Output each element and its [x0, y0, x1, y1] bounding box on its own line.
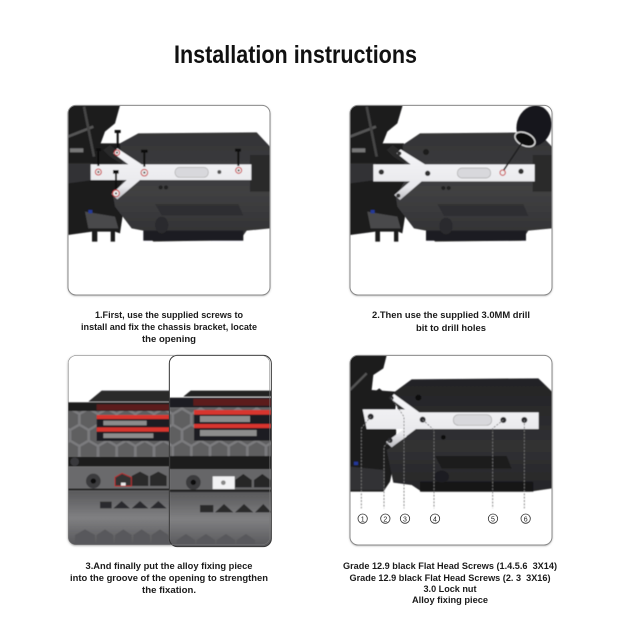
truck suspension and wheel: [350, 355, 397, 492]
caption: parts list: 3.0 Lock nut: [424, 584, 477, 595]
number markers 1 to 6: 4: [433, 516, 437, 523]
caption: step 3: [70, 561, 268, 596]
caption: step 1: 1.First, use the supplied screws to: [95, 310, 243, 321]
title: Installation instructions: [174, 41, 417, 69]
inset photo with alloy piece in place: [169, 355, 271, 547]
number markers 1 to 6: 1: [361, 516, 365, 523]
caption: step 2: 2.Then use the supplied 3.0MM drill: [372, 310, 530, 321]
battery tray close-up: [68, 391, 171, 545]
number markers 1 to 6: [358, 514, 530, 523]
number markers 1 to 6: 5: [491, 516, 495, 523]
caption: parts list: [343, 561, 557, 606]
truck suspension and wheel: [350, 105, 408, 242]
caption: step 2: bit to drill holes: [416, 323, 486, 334]
truck suspension and wheel: [68, 105, 125, 242]
silver chassis bracket: [363, 394, 539, 447]
caption: step 1: the opening: [142, 334, 196, 345]
panel: step 1 photo: [68, 105, 270, 296]
caption: step 2: [372, 310, 530, 334]
panel: step 2 photo: [350, 102, 556, 296]
caption: parts list: Alloy fixing piece: [412, 595, 488, 606]
caption: step 3: the fixation.: [142, 585, 196, 596]
caption: parts list: Grade 12.9 black Flat Head Screws (1.4.5.6 3X14): [343, 561, 557, 572]
caption: step 1: install and fix the chassis bracket, locate: [81, 322, 257, 333]
silver chassis bracket: [91, 148, 251, 199]
chassis body: [103, 132, 270, 242]
chassis body: [387, 132, 552, 242]
number markers 1 to 6: 6: [524, 516, 528, 523]
caption: step 1: [81, 310, 257, 345]
dashed leader lines: [361, 398, 524, 508]
opening outlined in red: [115, 473, 131, 486]
silver chassis bracket: [373, 149, 535, 200]
caption: step 3: into the groove of the opening to strengthen: [70, 573, 268, 584]
panel: parts key photo: [350, 355, 552, 546]
number markers 1 to 6: 3: [403, 516, 407, 523]
chassis body: [373, 378, 552, 492]
number markers 1 to 6: 2: [383, 516, 387, 523]
power drill with bit: [500, 102, 556, 175]
panel: step 3 photos: [68, 355, 271, 547]
caption: step 3: 3.And finally put the alloy fixing piece: [86, 561, 252, 572]
screws with red-circled holes: [95, 130, 242, 197]
caption: parts list: Grade 12.9 black Flat Head Screws (2. 3 3X16): [350, 573, 550, 584]
